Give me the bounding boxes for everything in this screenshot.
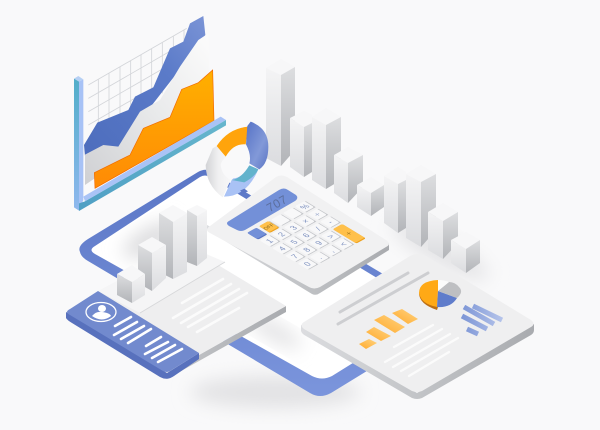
bar 7 bbox=[406, 165, 436, 247]
display value: 707 bbox=[264, 192, 290, 215]
calculator keys bbox=[247, 201, 367, 270]
bar 4 bbox=[334, 147, 363, 203]
blue list bars bbox=[462, 306, 502, 334]
bar 8 bbox=[428, 203, 458, 259]
calculator keys: 0 bbox=[302, 260, 314, 268]
bar 9 bbox=[451, 232, 480, 273]
bar base area bbox=[98, 245, 225, 313]
calculator keys: 9 bbox=[313, 239, 325, 247]
vertical axis bbox=[74, 76, 83, 211]
bar 3 bbox=[312, 108, 341, 189]
bar C bbox=[159, 205, 187, 279]
panel surface bbox=[66, 245, 286, 373]
donut segment: blue bbox=[246, 122, 268, 169]
panel surface bbox=[302, 254, 534, 392]
grey area bbox=[85, 33, 210, 185]
calculator keys: 5 bbox=[288, 238, 301, 246]
bar 6 bbox=[384, 167, 406, 233]
calculator keys: 2 bbox=[276, 231, 288, 238]
bar 5 bbox=[357, 177, 384, 216]
panel thickness bbox=[66, 306, 286, 379]
calculator keys: 8 bbox=[301, 246, 313, 253]
bar chart: left towers bbox=[117, 205, 207, 303]
calculator keys: ÷ bbox=[312, 211, 324, 218]
bar A bbox=[117, 265, 145, 303]
calculator keys: × bbox=[300, 218, 312, 225]
calculator keys: , bbox=[327, 248, 336, 254]
calculator body bbox=[207, 225, 389, 295]
calculator keys: % bbox=[298, 203, 312, 211]
calculator display bbox=[227, 188, 297, 231]
bar D bbox=[187, 205, 207, 266]
grey heading lines bbox=[338, 273, 428, 324]
donut segment: grey bbox=[206, 146, 231, 197]
bar 2 bbox=[290, 111, 312, 177]
donut segment: teal bbox=[232, 165, 258, 182]
orange area bbox=[94, 70, 214, 188]
profile lines bbox=[114, 317, 182, 362]
calculator keys: 7 bbox=[289, 253, 301, 260]
calculator keys: + bbox=[343, 230, 355, 237]
bar B bbox=[138, 237, 166, 291]
chart grid bbox=[88, 28, 187, 127]
horizontal axis bbox=[79, 117, 226, 211]
area chart with axes bbox=[74, 16, 226, 211]
icon: user avatar bbox=[86, 302, 116, 322]
calculator keys: OFF bbox=[262, 223, 277, 231]
pie chart bbox=[419, 280, 461, 310]
tablet frame bbox=[79, 170, 450, 396]
text lines bbox=[173, 279, 247, 332]
calculator keys: . bbox=[315, 255, 324, 260]
calculator keys: - bbox=[325, 219, 336, 225]
donut chart bbox=[206, 122, 268, 197]
calculator bbox=[207, 176, 389, 295]
report panel bbox=[301, 254, 534, 399]
calculator keys: < bbox=[338, 240, 350, 248]
frame connector bbox=[240, 189, 248, 193]
blue profile strip bbox=[66, 291, 199, 379]
donut segment: orange bbox=[217, 127, 248, 157]
bar 1 bbox=[266, 59, 295, 166]
calculator keys: 3 bbox=[288, 224, 300, 231]
calculator keys: 6 bbox=[300, 232, 313, 239]
donut segment: light blue bbox=[224, 165, 258, 197]
text lines bbox=[385, 325, 458, 376]
left document panel bbox=[66, 245, 286, 379]
calculator keys: 4 bbox=[276, 245, 289, 252]
panel thickness bbox=[301, 324, 534, 399]
calculator keys: 1 bbox=[264, 237, 276, 245]
orange bars bbox=[359, 309, 418, 349]
calculator keys: > bbox=[325, 233, 337, 240]
calculator keys: / bbox=[313, 226, 324, 232]
blue area bbox=[84, 16, 205, 156]
bar chart: right tower row bbox=[266, 59, 480, 273]
